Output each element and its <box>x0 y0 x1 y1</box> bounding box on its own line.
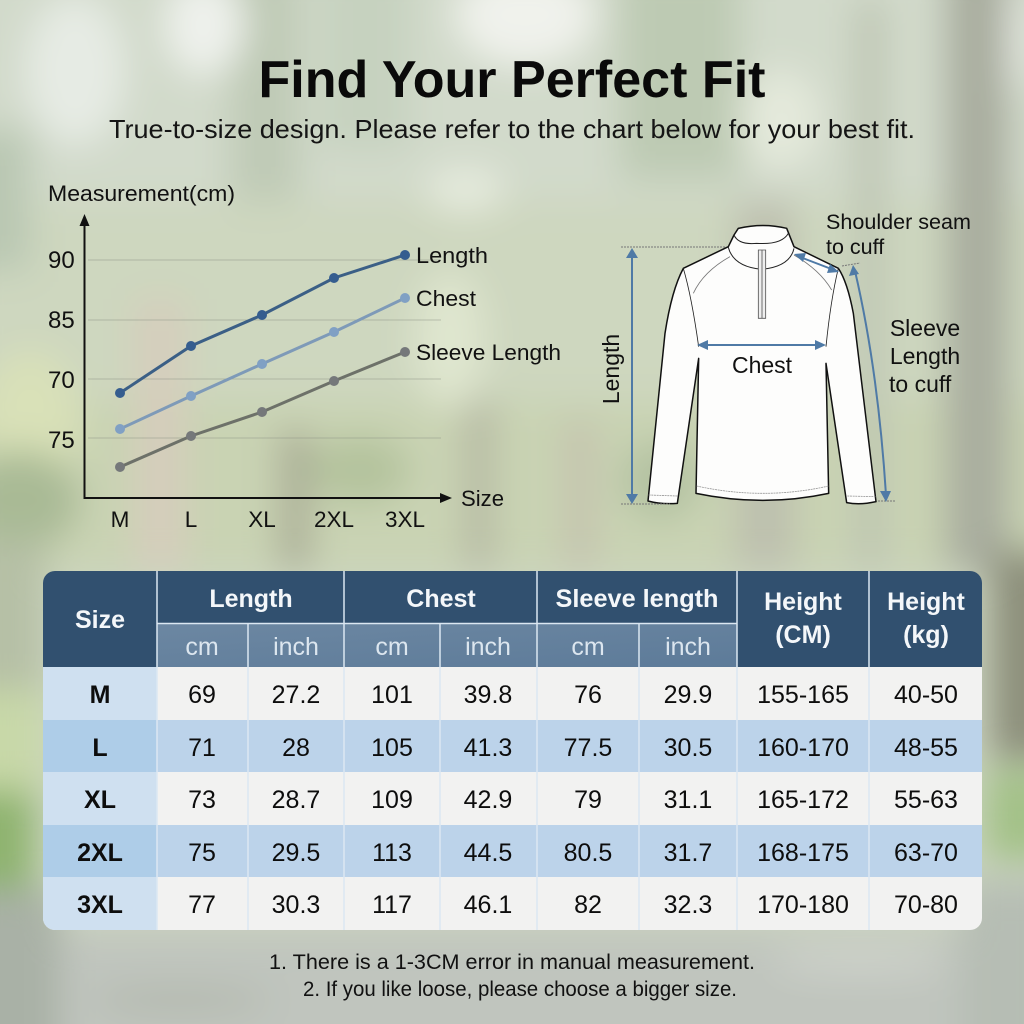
row: 2XL: 113 <box>372 839 412 867</box>
series: chest <box>115 293 410 434</box>
row: 2XL: 75 <box>188 839 216 867</box>
x-axis labels: XL <box>248 507 276 532</box>
row: XL: XL <box>84 786 116 814</box>
row: XL: 165-172 <box>757 786 849 814</box>
axes <box>80 214 452 503</box>
note 1: 1. There is a 1-3CM error in manual measurement. <box>269 950 755 974</box>
footnotes <box>269 950 755 1001</box>
label: shoulder seam to cuff: Shoulder seam <box>826 210 971 234</box>
header: height cm <box>766 592 842 648</box>
measure lines <box>621 247 896 504</box>
row: L: 71 <box>188 734 216 762</box>
label: length: Length <box>598 334 624 404</box>
row: L: 28 <box>282 734 310 762</box>
line chart <box>48 181 561 532</box>
label: shoulder seam to cuff: to cuff <box>826 235 884 259</box>
row: M: 27.2 <box>272 681 320 709</box>
jacket illustration <box>648 225 876 504</box>
row: M: 101 <box>371 681 413 709</box>
row: XL: 79 <box>574 786 602 814</box>
arrow: length <box>626 248 638 504</box>
table header <box>43 571 982 667</box>
row: XL: 55-63 <box>894 786 958 814</box>
x-axis labels: 2XL <box>314 507 354 532</box>
x-axis labels: M <box>111 507 129 532</box>
row: L: 77.5 <box>564 734 612 762</box>
header: weight kg: Height <box>887 588 966 616</box>
y-axis labels: 75 <box>48 427 75 454</box>
row: M: 69 <box>188 681 216 709</box>
row: 3XL: 170-180 <box>757 891 849 919</box>
row: 3XL: 82 <box>574 891 602 919</box>
label: sleeve length to cuff: Sleeve <box>890 315 960 341</box>
row: 3XL: 30.3 <box>272 891 320 919</box>
row: 3XL: 46.1 <box>464 891 512 919</box>
sub-headers: units: inch <box>665 633 711 661</box>
row: XL: 109 <box>371 786 413 814</box>
row: 3XL: 77 <box>188 891 216 919</box>
row: 2XL: 29.5 <box>272 839 320 867</box>
row: L: 48-55 <box>894 734 958 762</box>
sub-headers: units: cm <box>185 633 219 661</box>
x-axis labels <box>111 507 425 532</box>
row: XL: 31.1 <box>664 786 712 814</box>
label: sleeve length to cuff <box>889 315 960 397</box>
y-axis labels <box>48 247 75 454</box>
row: L: 160-170 <box>757 734 849 762</box>
title: Find Your Perfect Fit <box>258 51 766 109</box>
header: size: Size <box>75 606 125 634</box>
row: L: L <box>92 734 108 762</box>
label: shoulder seam to cuff <box>826 210 971 259</box>
y-axis labels: 70 <box>48 367 75 394</box>
y-axis labels: 85 <box>48 307 75 334</box>
header: weight kg <box>888 592 965 648</box>
row: 2XL: 80.5 <box>564 839 612 867</box>
header: sleeve length: Sleeve length <box>556 585 718 613</box>
header: weight kg: (kg) <box>903 621 949 649</box>
x-axis title: Size <box>461 486 504 511</box>
row: 2XL: 31.7 <box>664 839 712 867</box>
series: length <box>115 250 410 398</box>
arrow: shoulder seam <box>794 253 839 273</box>
row: 2XL: 2XL <box>77 839 123 867</box>
row: L <box>43 720 982 772</box>
sub-headers: units: cm <box>571 633 605 661</box>
label: sleeve length to cuff: Length <box>890 343 960 369</box>
row: 3XL: 32.3 <box>664 891 712 919</box>
row: 3XL: 3XL <box>77 891 123 919</box>
row: 2XL <box>43 825 982 877</box>
garment measurement diagram <box>598 210 971 504</box>
y-axis title: Measurement(cm) <box>48 181 235 206</box>
label: chest: Chest <box>732 352 793 378</box>
x-axis labels: 3XL <box>385 507 425 532</box>
x-axis labels: L <box>185 507 197 532</box>
sub-headers: units: cm <box>375 633 409 661</box>
row: 2XL: 44.5 <box>464 839 512 867</box>
row: 2XL: 63-70 <box>894 839 958 867</box>
row: M: M <box>90 681 110 709</box>
arrow: chest <box>697 340 826 350</box>
row: XL: 73 <box>188 786 216 814</box>
row: M: 155-165 <box>757 681 849 709</box>
row: M: 40-50 <box>894 681 958 709</box>
header: height cm: (CM) <box>775 621 831 649</box>
header: chest: Chest <box>406 585 476 613</box>
series: sleeve length <box>115 347 410 472</box>
row: XL: 28.7 <box>272 786 320 814</box>
series labels: Sleeve Length <box>416 340 561 365</box>
row: XL: 42.9 <box>464 786 512 814</box>
row: M: 39.8 <box>464 681 512 709</box>
sub-headers: units: inch <box>465 633 511 661</box>
series labels: Length <box>416 243 488 268</box>
header: length: Length <box>209 585 293 613</box>
row: M <box>43 667 982 720</box>
row: 3XL: 117 <box>372 891 412 919</box>
series labels: Chest <box>416 286 477 311</box>
size table <box>43 571 982 930</box>
row: L: 30.5 <box>664 734 712 762</box>
label: sleeve length to cuff: to cuff <box>889 371 952 397</box>
y-axis labels: 90 <box>48 247 75 274</box>
row: M: 76 <box>574 681 602 709</box>
note 2: 2. If you like loose, please choose a bigger size. <box>303 977 737 1001</box>
row: L: 105 <box>371 734 413 762</box>
row: 3XL <box>43 877 982 930</box>
sub-headers: units <box>186 637 710 655</box>
row: 2XL: 168-175 <box>757 839 849 867</box>
row: M: 29.9 <box>664 681 712 709</box>
row: XL <box>43 772 982 825</box>
row: L: 41.3 <box>464 734 512 762</box>
arrow: sleeve <box>849 265 891 502</box>
grid lines <box>88 260 441 438</box>
sub-headers: units: inch <box>273 633 319 661</box>
row: 3XL: 70-80 <box>894 891 958 919</box>
series labels <box>416 243 561 365</box>
header: height cm: Height <box>764 588 843 616</box>
subtitle: True-to-size design. Please refer to the chart below for your best fit. <box>109 114 915 144</box>
